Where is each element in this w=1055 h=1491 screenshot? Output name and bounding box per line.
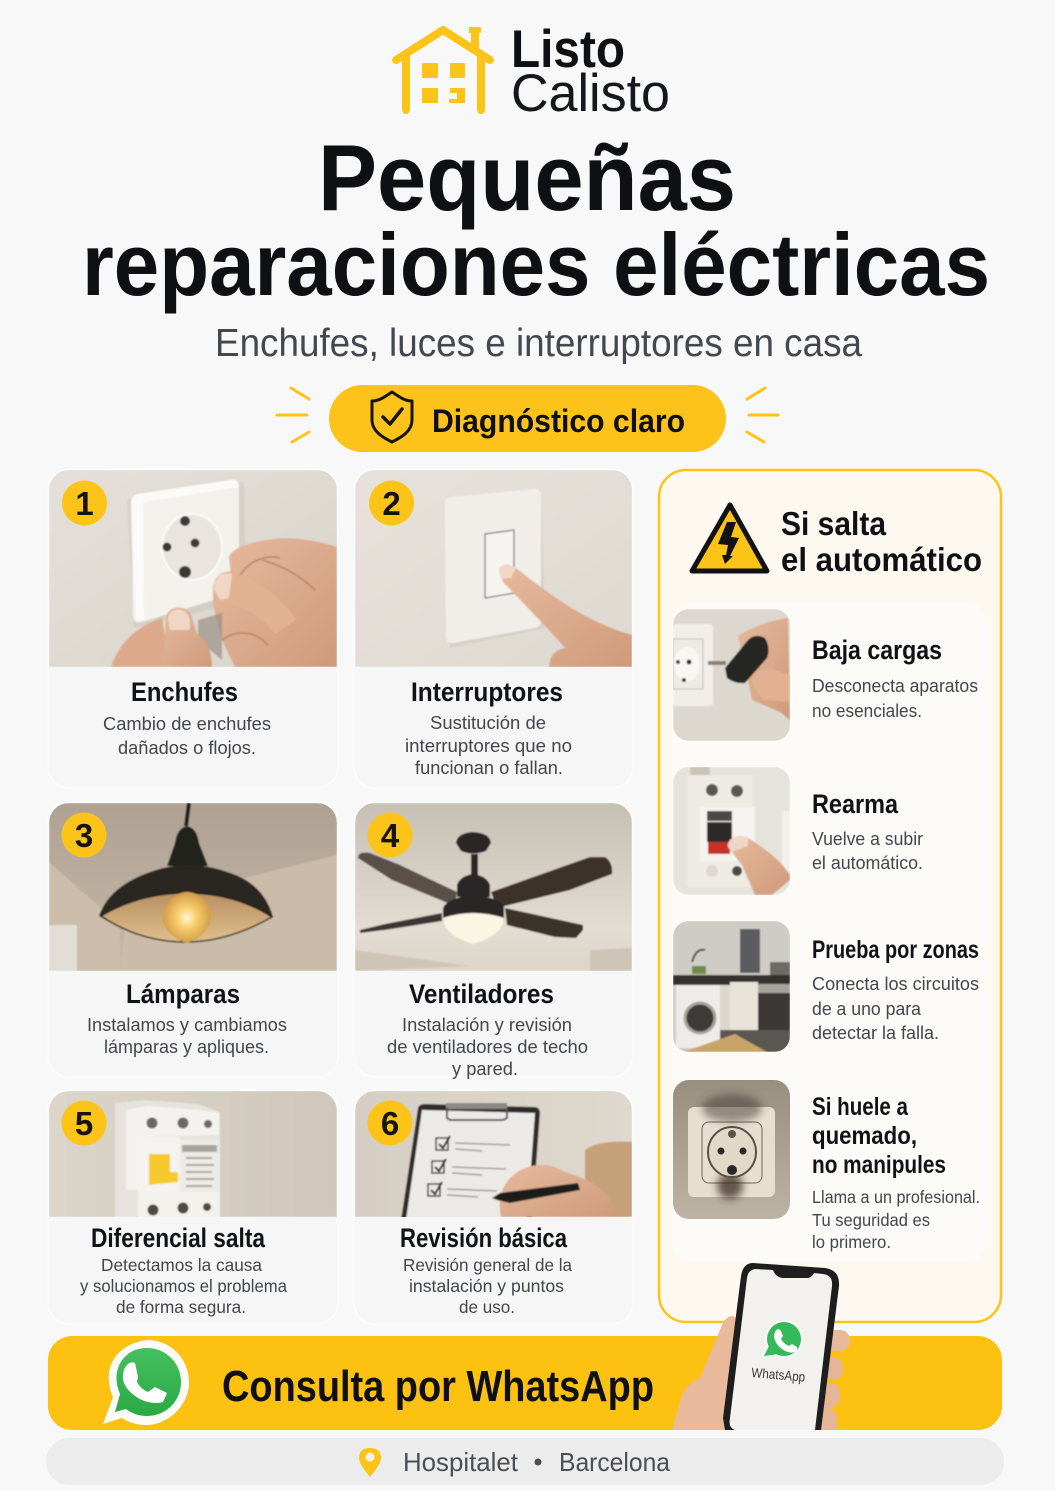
photo: pendant lamp xyxy=(49,803,337,971)
number badge 5: 5 xyxy=(75,1105,93,1142)
banner background xyxy=(48,1336,1002,1430)
card 4: Ventiladores xyxy=(354,802,633,1079)
card text: Instalación y revisión xyxy=(402,1014,572,1035)
photo: ceiling fan xyxy=(355,803,632,971)
card 5: Diferencial salta xyxy=(48,1090,338,1324)
step text: el automático. xyxy=(812,852,923,873)
number badge 5 xyxy=(62,1100,106,1146)
step text xyxy=(812,1093,980,1252)
icon: warning triangle xyxy=(692,505,767,571)
panel heading: Si salta xyxy=(781,505,887,542)
logo wordmark: Listo xyxy=(511,20,625,79)
number badge 6: 6 xyxy=(381,1105,399,1142)
step text: Rearma xyxy=(812,789,899,819)
step text: Baja cargas xyxy=(812,635,942,665)
card text xyxy=(400,1223,572,1317)
subtitle: Enchufes, luces e interruptores en casa xyxy=(215,322,862,365)
phone screen xyxy=(730,1269,832,1430)
icon: shield check xyxy=(372,392,412,442)
step: Rearma xyxy=(673,767,923,895)
badge label: Diagnóstico claro xyxy=(432,403,685,439)
number badge 1 xyxy=(62,480,107,526)
card 1: Enchufes xyxy=(49,470,337,758)
number badge 3: 3 xyxy=(75,817,93,854)
card text: de forma segura. xyxy=(116,1297,246,1317)
card text: dañados o flojos. xyxy=(118,737,256,758)
photo: clipboard checklist xyxy=(355,1091,632,1220)
card text: instalación y puntos xyxy=(409,1276,564,1296)
logo wordmark: Calisto xyxy=(511,64,670,123)
number badge 6 xyxy=(368,1100,412,1146)
photo: finger on switch xyxy=(355,470,632,667)
step text: Si huele a xyxy=(812,1093,909,1121)
banner: Consulta por WhatsApp xyxy=(48,1263,1002,1438)
step: Si huele a quemado xyxy=(673,1080,980,1252)
location text: Hospitalet xyxy=(403,1447,519,1477)
card text: funcionan o fallan. xyxy=(415,757,563,778)
photo: breaker with finger xyxy=(673,767,790,895)
title: Pequeñas xyxy=(318,125,736,230)
step text: Tu seguridad es xyxy=(812,1210,930,1230)
steps backing xyxy=(672,603,986,1261)
card text: de ventiladores de techo xyxy=(387,1036,588,1057)
card text: lámparas y apliques. xyxy=(104,1036,269,1057)
card text: Revisión básica xyxy=(400,1223,568,1253)
logo wordmark xyxy=(511,20,670,123)
card body xyxy=(354,469,633,788)
card text: Lámparas xyxy=(126,979,240,1009)
footer pill xyxy=(46,1438,1004,1485)
card body xyxy=(48,1090,338,1324)
card text xyxy=(387,979,588,1079)
card text: Diferencial salta xyxy=(91,1223,266,1253)
location text xyxy=(403,1447,671,1477)
photo: kitchen xyxy=(673,921,790,1052)
fingers xyxy=(821,1330,850,1430)
step text xyxy=(812,635,978,721)
step text: quemado, xyxy=(812,1122,917,1150)
step text: no esenciales. xyxy=(812,700,922,721)
location text: Barcelona xyxy=(559,1447,671,1477)
card text xyxy=(405,677,572,778)
phone body xyxy=(723,1263,839,1430)
card text: de uso. xyxy=(459,1297,515,1317)
card text: Instalamos y cambiamos xyxy=(87,1014,287,1035)
card text: y pared. xyxy=(452,1058,518,1079)
panel heading: el automático xyxy=(781,541,982,578)
step text: lo primero. xyxy=(812,1232,891,1252)
step text: Vuelve a subir xyxy=(812,828,923,849)
card 3: Lámparas xyxy=(48,802,338,1077)
number badge 2 xyxy=(369,480,414,526)
step: Baja cargas xyxy=(673,609,978,741)
card text xyxy=(87,979,287,1057)
panel heading xyxy=(781,505,982,578)
footer: location xyxy=(46,1438,1004,1485)
card text: interruptores que no xyxy=(405,735,572,756)
step text: Conecta los circuitos xyxy=(812,973,979,994)
card text: Enchufes xyxy=(131,677,238,707)
badge: Diagnóstico claro xyxy=(277,385,778,452)
number badge 2: 2 xyxy=(382,485,401,522)
number badge 3 xyxy=(62,812,106,858)
card text: Detectamos la causa xyxy=(101,1255,262,1275)
step text: Desconecta aparatos xyxy=(812,675,978,696)
title: reparaciones eléctricas xyxy=(82,215,990,314)
step text: de a uno para xyxy=(812,998,922,1019)
step: Prueba por zonas xyxy=(673,921,979,1052)
photo: breaker panel xyxy=(49,1091,337,1217)
badge pill xyxy=(329,385,726,452)
step text: Llama a un profesional. xyxy=(812,1187,980,1207)
spark lines right xyxy=(747,388,778,442)
hand xyxy=(672,1316,736,1430)
card text: Revisión general de la xyxy=(403,1255,572,1275)
icon: house xyxy=(396,27,490,110)
step text xyxy=(812,789,923,873)
illustration: hand holding phone xyxy=(672,1263,850,1438)
card text xyxy=(80,1223,287,1317)
card 6: Revisión básica xyxy=(354,1090,633,1324)
step text: detectar la falla. xyxy=(812,1022,939,1043)
spark lines left xyxy=(277,388,309,442)
step text xyxy=(812,936,979,1043)
banner label: Consulta por WhatsApp xyxy=(222,1362,654,1411)
card body xyxy=(48,802,338,1077)
step text: Prueba por zonas xyxy=(812,936,979,964)
card text: Cambio de enchufes xyxy=(103,713,271,734)
card body xyxy=(354,802,633,1077)
screen label: WhatsApp xyxy=(751,1365,806,1385)
card body xyxy=(354,1090,633,1324)
card text xyxy=(103,677,271,758)
card text: Interruptores xyxy=(411,677,563,707)
number badge 1: 1 xyxy=(75,485,94,522)
logo: Listo Calisto xyxy=(396,20,670,123)
photo: socket and hands xyxy=(49,470,337,667)
title xyxy=(82,125,990,314)
step text: no manipules xyxy=(812,1151,946,1179)
icon: location pin xyxy=(359,1448,381,1477)
panel: Si salta el automático xyxy=(659,470,1001,1322)
card text: Sustitución de xyxy=(430,712,546,733)
card text: y solucionamos el problema xyxy=(80,1276,287,1296)
card text: Ventiladores xyxy=(409,979,554,1009)
number badge 4 xyxy=(368,812,412,858)
photo: plug being removed xyxy=(673,609,790,741)
card body xyxy=(48,469,338,788)
card 2: Interruptores xyxy=(354,469,633,788)
panel frame xyxy=(659,470,1001,1322)
WhatsApp glyph on screen xyxy=(764,1320,803,1358)
photo: burnt socket xyxy=(673,1080,790,1219)
number badge 4: 4 xyxy=(381,817,400,854)
icon: WhatsApp xyxy=(103,1340,189,1425)
